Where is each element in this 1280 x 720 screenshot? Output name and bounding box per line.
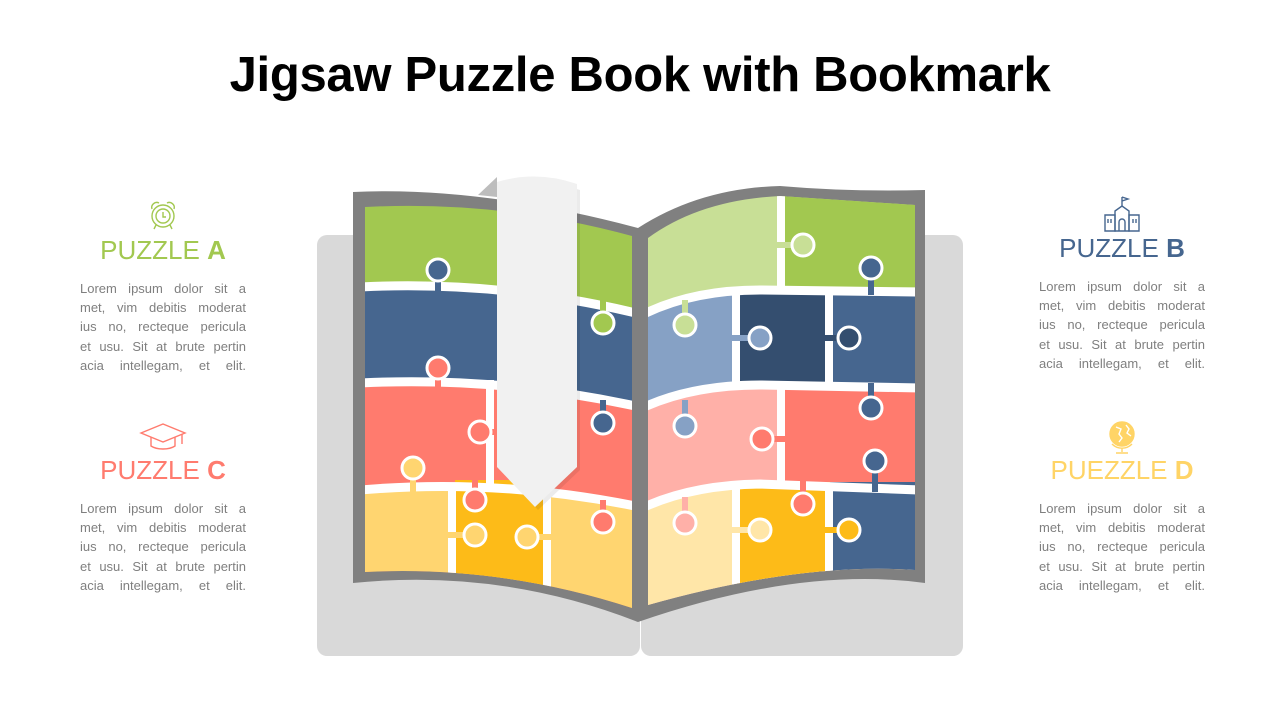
text A: Lorem ipsum dolor sit a bbox=[80, 281, 246, 296]
text D: acia intellegam, et elit. bbox=[1039, 578, 1205, 593]
text C: et usu. Sit at brute pertin bbox=[80, 559, 246, 574]
text B: acia intellegam, et elit. bbox=[1039, 356, 1205, 371]
text C: Lorem ipsum dolor sit a bbox=[80, 501, 246, 516]
heading A: PUZZLE A bbox=[100, 235, 226, 265]
text C: acia intellegam, et elit. bbox=[80, 578, 246, 593]
text A: acia intellegam, et elit. bbox=[80, 358, 246, 373]
panel: puzzle D bbox=[1039, 421, 1205, 593]
knobs left bbox=[413, 270, 603, 537]
left page puzzle bbox=[365, 206, 632, 608]
heading D: PUEZZLE D bbox=[1050, 455, 1194, 485]
icon: graduation cap bbox=[139, 423, 187, 450]
icon: school building bbox=[1104, 196, 1140, 232]
icon: alarm clock bbox=[151, 202, 175, 230]
panel: puzzle B bbox=[1039, 196, 1205, 371]
book illustration bbox=[317, 176, 963, 656]
text D: ius no, recteque pericula bbox=[1039, 539, 1205, 554]
knobs right bbox=[685, 245, 875, 530]
text B: met, vim debitis moderat bbox=[1039, 298, 1205, 313]
right page puzzle bbox=[640, 190, 922, 620]
text D: Lorem ipsum dolor sit a bbox=[1039, 501, 1205, 516]
text B bbox=[1039, 279, 1205, 371]
text C bbox=[80, 501, 246, 593]
text D: met, vim debitis moderat bbox=[1039, 520, 1205, 535]
heading C: PUZZLE C bbox=[100, 455, 226, 485]
text B: Lorem ipsum dolor sit a bbox=[1039, 279, 1205, 294]
text D: et usu. Sit at brute pertin bbox=[1039, 559, 1205, 574]
icon: globe bbox=[1109, 421, 1135, 454]
panel: puzzle A bbox=[80, 202, 246, 373]
title: Jigsaw Puzzle Book with Bookmark bbox=[230, 48, 1050, 102]
text A: ius no, recteque pericula bbox=[80, 319, 246, 334]
text C: met, vim debitis moderat bbox=[80, 520, 246, 535]
text C: ius no, recteque pericula bbox=[80, 539, 246, 554]
bookmark bbox=[478, 176, 580, 510]
text B: ius no, recteque pericula bbox=[1039, 317, 1205, 332]
book cover outline bbox=[353, 186, 925, 622]
text A bbox=[80, 281, 246, 373]
book shadow base bbox=[317, 235, 963, 656]
text D bbox=[1039, 501, 1205, 593]
text A: et usu. Sit at brute pertin bbox=[80, 339, 246, 354]
text B: et usu. Sit at brute pertin bbox=[1039, 337, 1205, 352]
heading B: PUZZLE B bbox=[1059, 233, 1185, 263]
panel: puzzle C bbox=[80, 423, 246, 593]
text A: met, vim debitis moderat bbox=[80, 300, 246, 315]
